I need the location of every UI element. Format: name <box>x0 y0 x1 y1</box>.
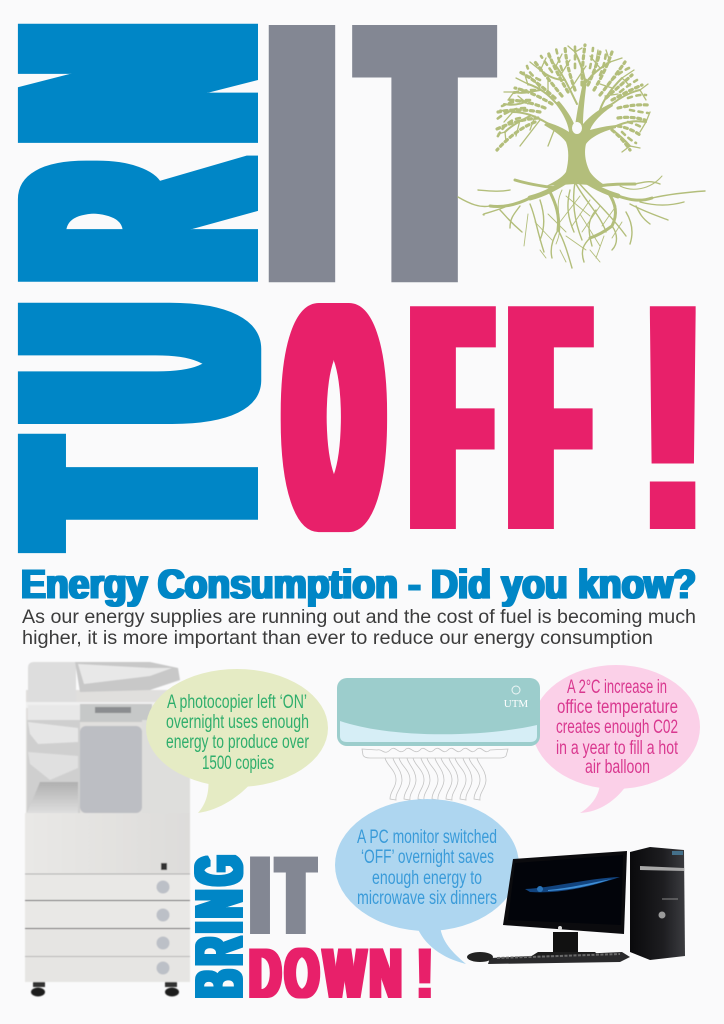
callout: temperature <box>532 665 700 813</box>
icon: air conditioner <box>337 678 540 800</box>
callout: temperature: creates enough C02 <box>556 717 678 738</box>
callout: PC monitor <box>335 799 519 964</box>
callout: temperature: in a year to fill a hot <box>556 738 679 759</box>
callout: temperature: office temperature <box>557 697 678 718</box>
subtitle: DOWN !: DOWN ! <box>249 935 432 1013</box>
callout: temperature: air balloon <box>585 757 650 778</box>
subtitle: IT: IT <box>252 835 313 955</box>
icon: tree with roots <box>458 45 705 268</box>
intro text block <box>22 607 696 649</box>
icon: photocopier <box>25 662 190 996</box>
callout: photocopier: energy to produce over <box>166 732 309 753</box>
icon: air conditioner: UTM <box>504 698 528 710</box>
callout: photocopier: overnight uses enough <box>166 712 309 733</box>
title: OFF !: OFF ! <box>291 240 691 593</box>
callout: PC monitor: enough energy to <box>372 868 482 889</box>
icon: desktop computer <box>467 847 685 964</box>
callout: PC monitor: microwave six dinners <box>357 888 497 909</box>
callout: PC monitor: A PC monitor switched <box>357 827 497 848</box>
subtitle: BRING: BRING <box>183 856 257 998</box>
intro text block: higher, it is more important than ever to reduce our energy consumption <box>22 628 653 649</box>
callout: temperature: A 2°C increase in <box>567 677 667 698</box>
callout: PC monitor: ‘OFF’ overnight saves <box>361 847 494 868</box>
callout: photocopier <box>146 669 328 813</box>
intro text block: As our energy supplies are running out and the cost of fuel is becoming much <box>22 607 696 628</box>
callout: photocopier: A photocopier left ‘ON’ <box>167 692 307 713</box>
callout: photocopier: 1500 copies <box>202 753 274 774</box>
